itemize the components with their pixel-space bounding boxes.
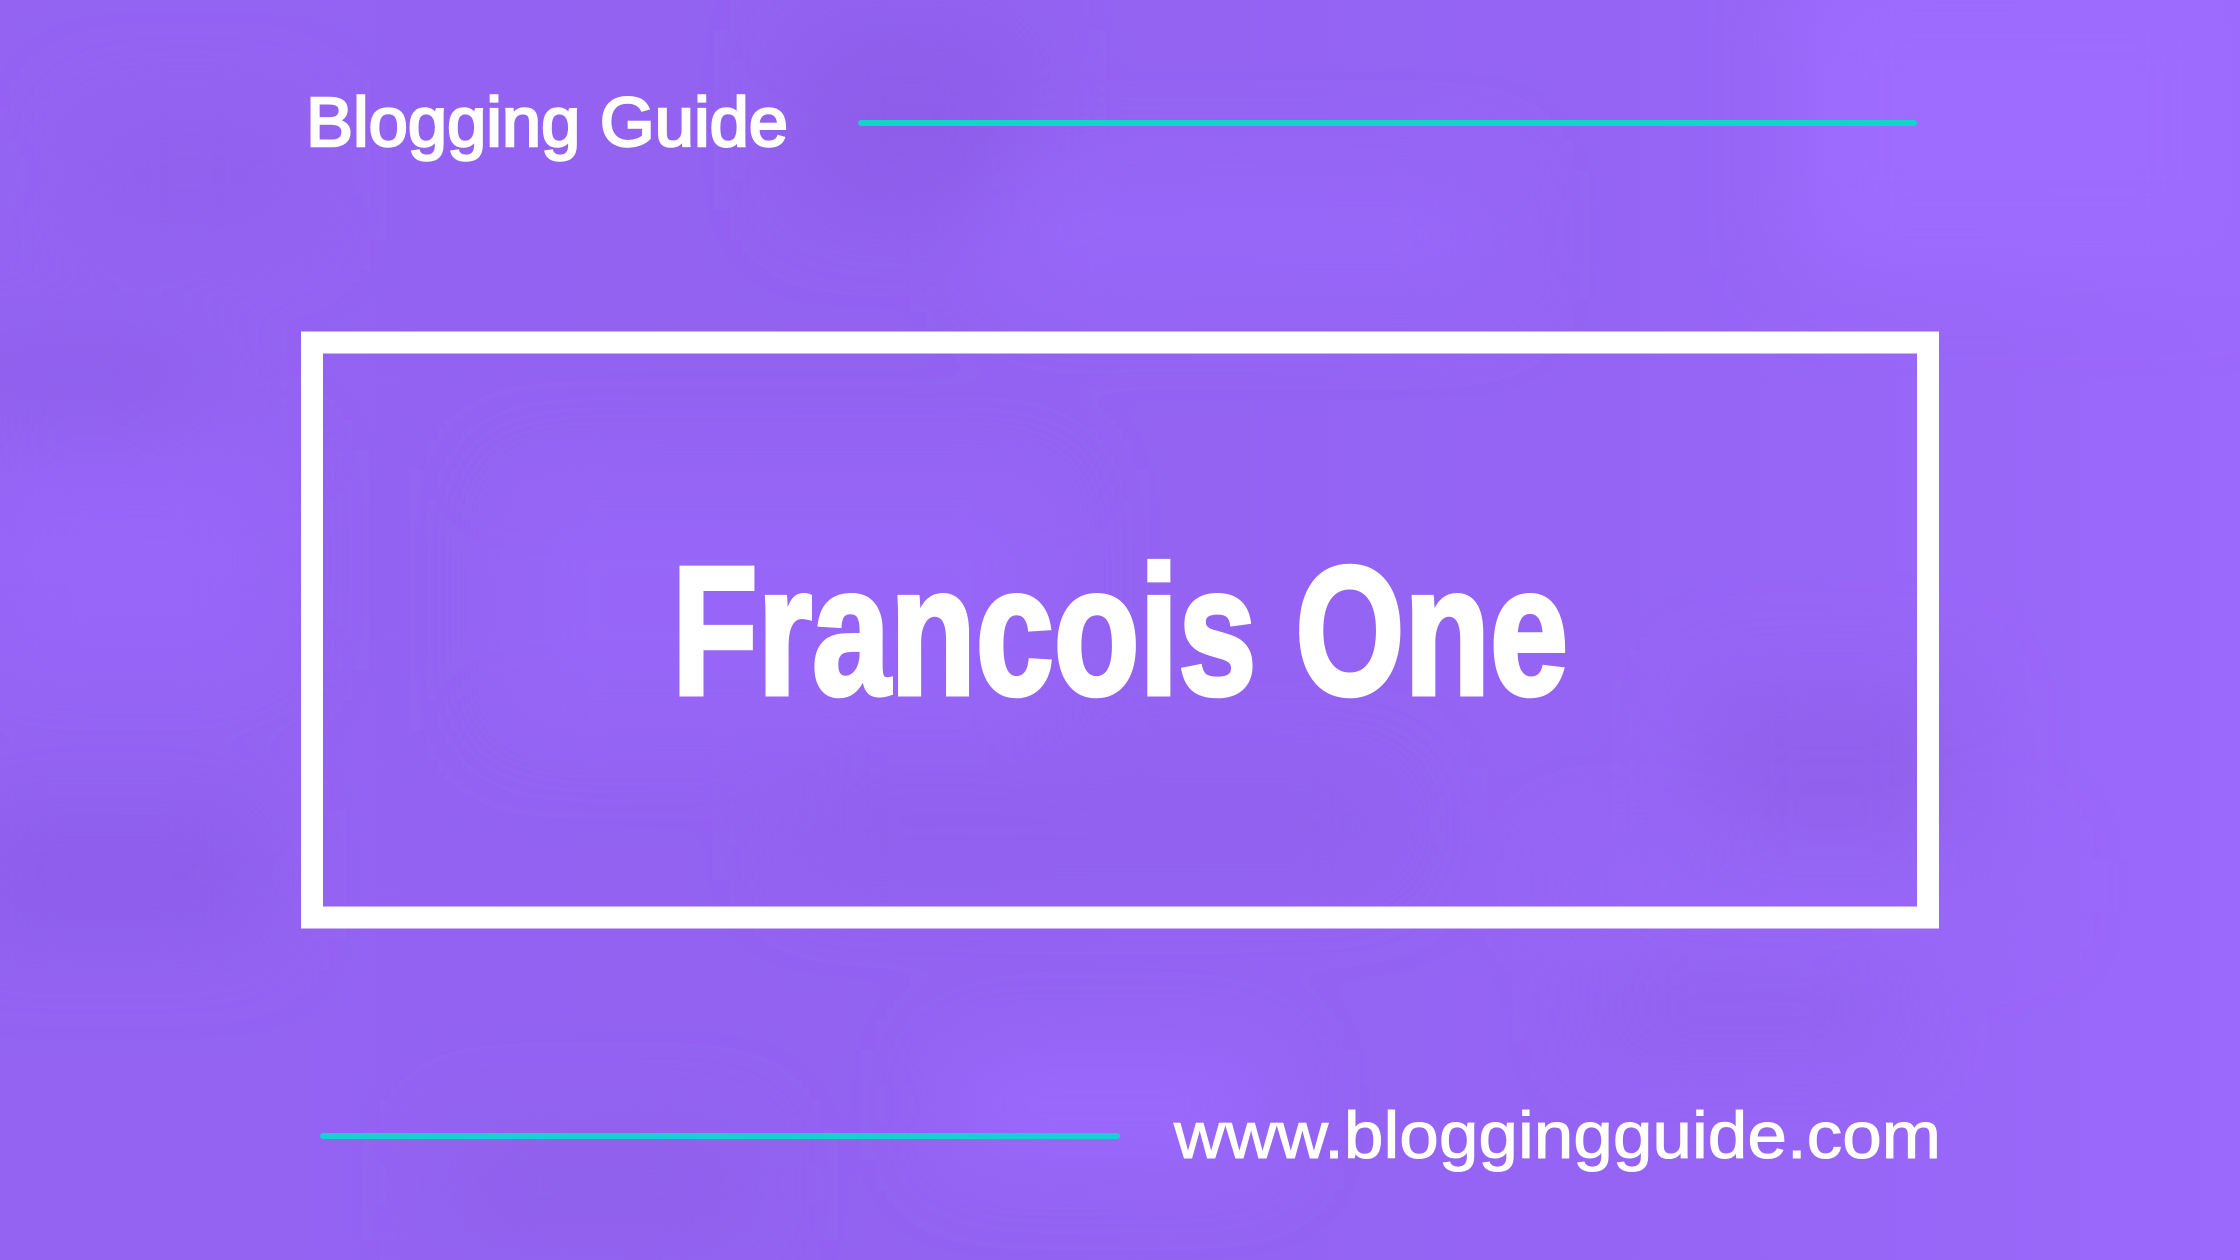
title frame [312,342,1928,918]
website url: www.bloggingguide.com [1173,1098,1941,1172]
bottom accent line [320,1133,1120,1139]
top accent line [858,120,1917,126]
heading: Blogging Guide: Blogging Guide [306,83,788,161]
title: Francois One: Francois One [672,528,1568,733]
